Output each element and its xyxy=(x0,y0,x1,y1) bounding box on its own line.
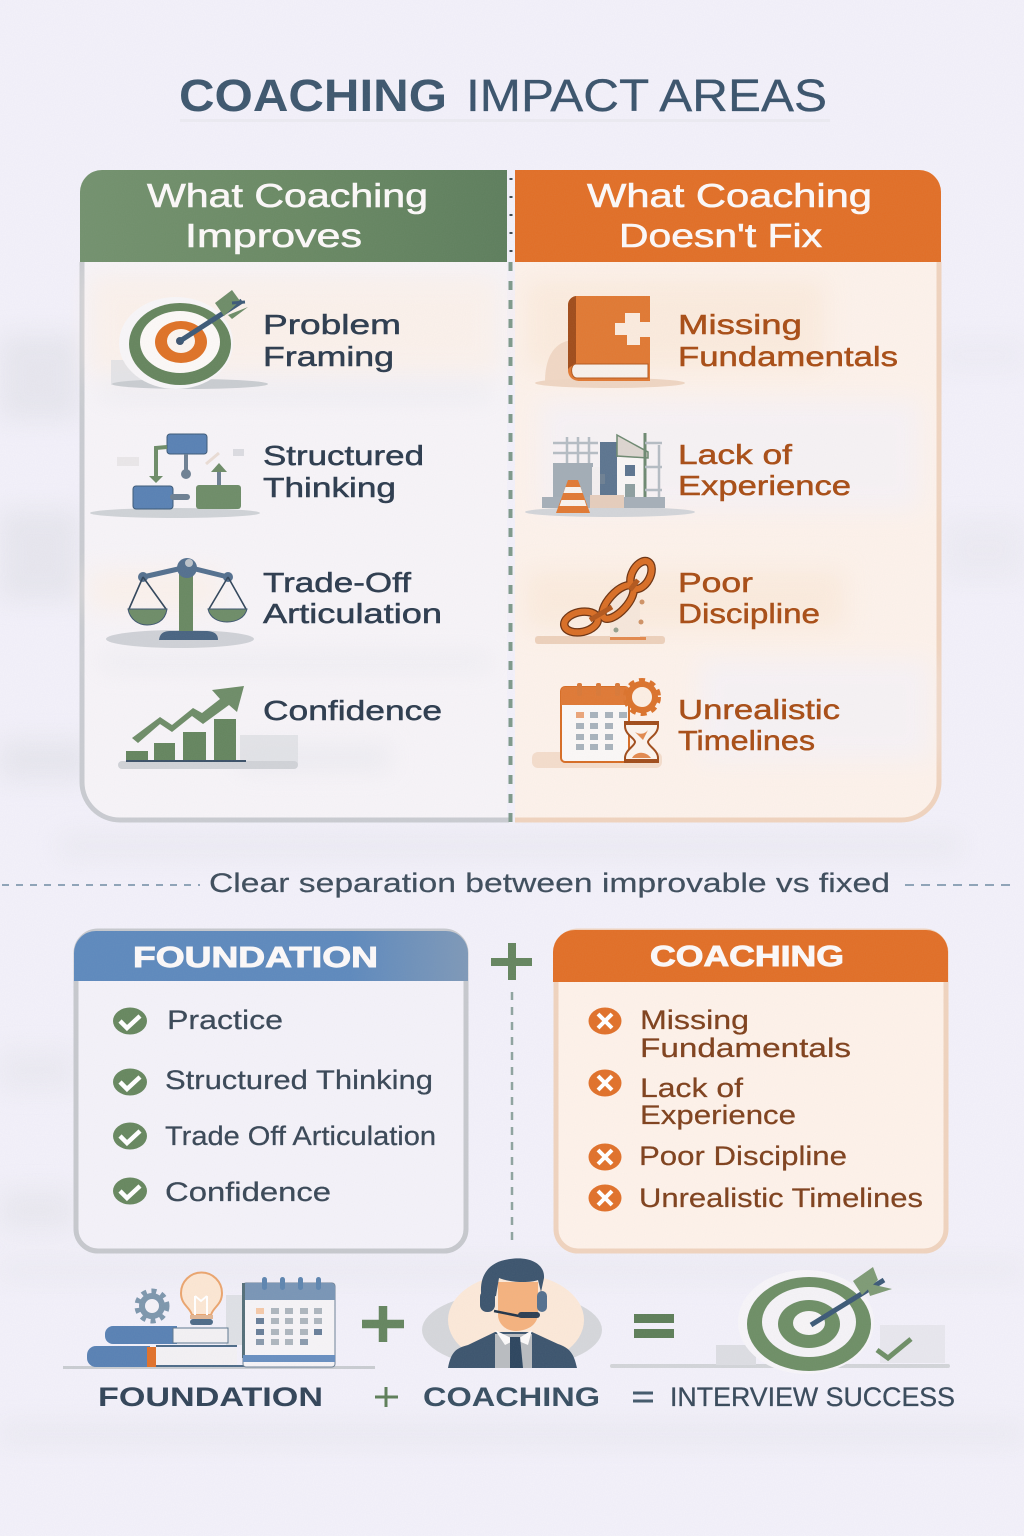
label: structured thinking xyxy=(263,440,424,503)
label: unrealistic timelines xyxy=(678,694,840,756)
equation labels: COACHING xyxy=(423,1382,600,1412)
cross item: missing fundamentals: Fundamentals xyxy=(640,1033,851,1063)
equation labels xyxy=(98,1382,955,1412)
panel: coaching xyxy=(553,930,948,1251)
icon: coach with headset xyxy=(422,1258,602,1368)
label: poor discipline xyxy=(678,567,820,629)
check item: confidence xyxy=(113,1177,331,1207)
heading: coaching: COACHING xyxy=(650,941,844,973)
label: unrealistic timelines: Unrealistic xyxy=(678,694,840,725)
heading: what coaching improves xyxy=(80,170,507,262)
separator caption: Clear separation between improvable vs fixed xyxy=(209,868,890,898)
heading: what coaching doesn't fix xyxy=(515,170,941,262)
icon: book with missing piece xyxy=(535,296,685,388)
title xyxy=(179,70,830,122)
icon: building under construction xyxy=(525,433,695,517)
label: trade-off articulation: Articulation xyxy=(263,598,442,629)
heading: foundation xyxy=(74,931,468,981)
panel: what coaching improves xyxy=(80,170,509,822)
icon: calendar and hourglass xyxy=(532,680,662,768)
label: unrealistic timelines: Timelines xyxy=(678,725,815,756)
label: missing fundamentals: Missing xyxy=(678,309,802,340)
title: IMPACT AREAS xyxy=(466,70,827,121)
heading: coaching xyxy=(553,930,948,982)
cross item: poor discipline: Poor Discipline xyxy=(639,1141,847,1171)
title: COACHING xyxy=(179,70,447,121)
equation labels: INTERVIEW SUCCESS xyxy=(670,1382,955,1412)
plus connector xyxy=(491,943,532,1245)
panel: what coaching doesn't fix xyxy=(515,170,941,822)
check item: structured thinking: Structured Thinking xyxy=(165,1065,433,1095)
label: trade-off articulation xyxy=(263,567,442,629)
icon: broken chain xyxy=(535,558,665,644)
label: problem framing xyxy=(263,309,401,372)
cross item: lack of experience: Experience xyxy=(640,1100,796,1130)
cross item: lack of experience: Lack of xyxy=(640,1073,744,1103)
label: missing fundamentals: Fundamentals xyxy=(678,341,898,372)
heading: what coaching doesn't fix: What Coaching xyxy=(587,177,872,214)
equation labels: FOUNDATION xyxy=(98,1382,323,1412)
label: trade-off articulation: Trade-Off xyxy=(263,567,411,598)
label: lack of experience: Experience xyxy=(678,470,851,501)
icon: large target with check xyxy=(610,1267,950,1374)
icon: flowchart xyxy=(90,434,260,518)
label: problem framing: Framing xyxy=(263,341,394,372)
cross item: poor discipline xyxy=(588,1141,847,1171)
icon: foundation books, bulb and calendar xyxy=(63,1272,375,1369)
label: lack of experience xyxy=(678,439,851,501)
check item: confidence: Confidence xyxy=(165,1177,331,1207)
icon: plus xyxy=(362,1306,404,1342)
panel: foundation xyxy=(74,931,468,1251)
icon: target with arrow xyxy=(111,290,268,389)
label: lack of experience: Lack of xyxy=(678,439,792,470)
icon: balance scale xyxy=(106,558,254,648)
cross item: missing fundamentals xyxy=(588,1005,851,1063)
label: poor discipline: Discipline xyxy=(678,598,820,629)
heading: what coaching improves: What Coaching xyxy=(147,177,428,214)
check item: practice xyxy=(113,1005,283,1035)
check item: practice: Practice xyxy=(167,1005,283,1035)
label: poor discipline: Poor xyxy=(678,567,753,598)
cross item: lack of experience xyxy=(588,1070,796,1130)
label: problem framing: Problem xyxy=(263,309,401,340)
label: structured thinking: Thinking xyxy=(263,472,396,503)
heading: what coaching doesn't fix: Doesn't Fix xyxy=(619,217,823,254)
cross item: missing fundamentals: Missing xyxy=(640,1005,749,1035)
label: structured thinking: Structured xyxy=(263,440,424,471)
label: confidence: Confidence xyxy=(263,695,442,726)
icon: equals xyxy=(634,1314,674,1338)
check item: trade off articulation: Trade Off Articulation xyxy=(165,1121,436,1151)
heading: what coaching improves: Improves xyxy=(185,217,362,254)
heading: foundation: FOUNDATION xyxy=(133,942,378,974)
cross item: unrealistic timelines: Unrealistic Timelines xyxy=(639,1183,923,1213)
icon: growth chart xyxy=(118,686,298,769)
label: missing fundamentals xyxy=(678,309,898,372)
